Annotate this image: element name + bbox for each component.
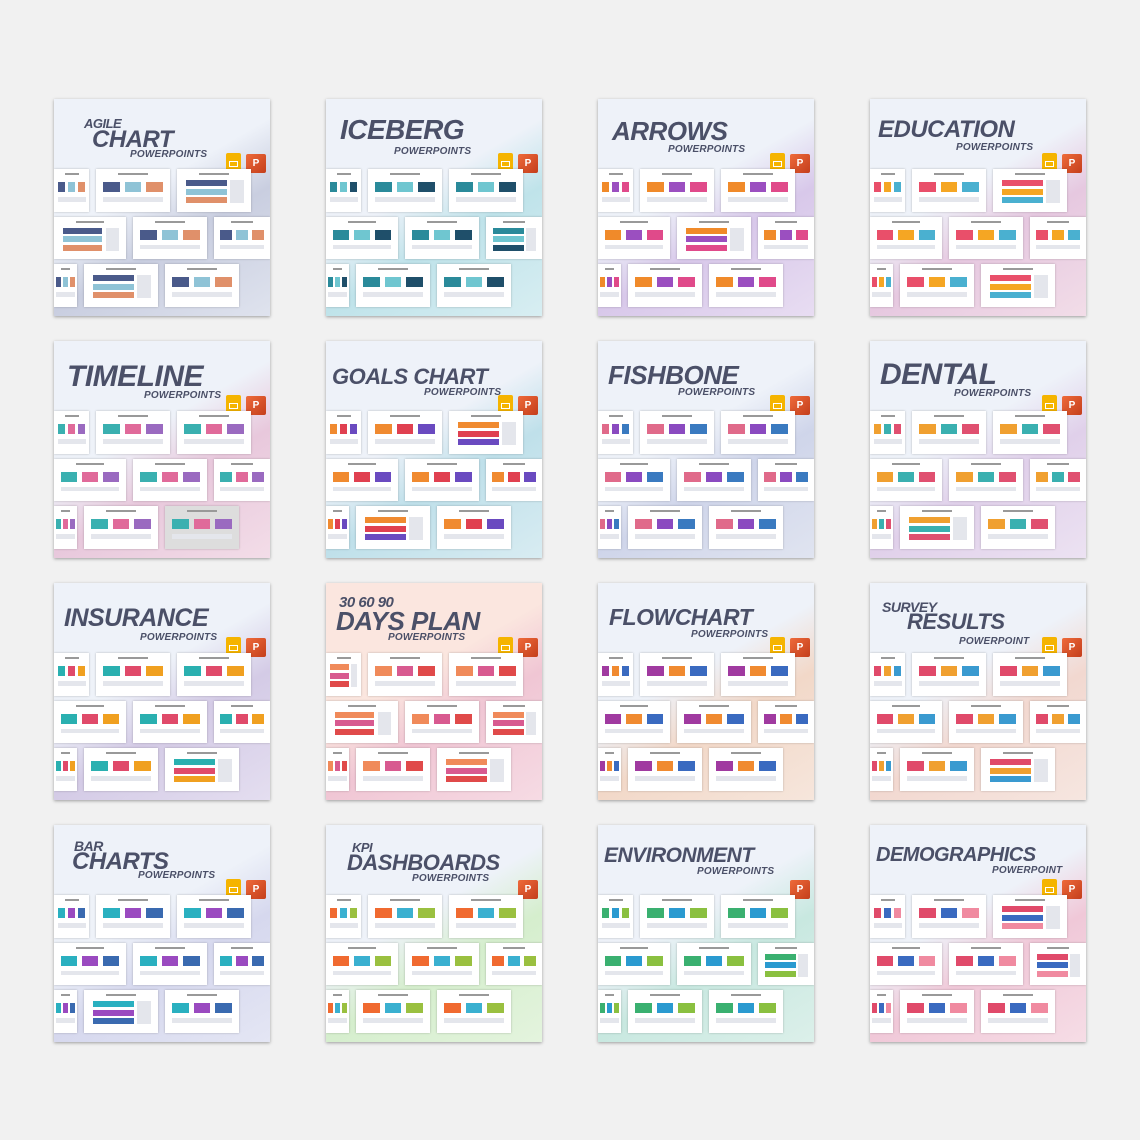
title: education [878,116,1033,153]
title: 30 60 90 days plan [336,594,481,643]
title: demographics: DEMOGRAPHICS [876,844,1036,866]
title: goals chart: POWERPOINTS [424,387,501,398]
card: arrows [598,99,814,316]
card: survey results [870,583,1086,800]
title: dental [880,358,1031,399]
title: kpi dashboards [347,840,500,884]
slide thumbnails [870,652,1086,792]
card: kpi dashboards [326,825,542,1042]
title: flowchart [609,604,768,640]
icons: google slides and powerpoint: P [1069,400,1075,411]
title: agile chart: POWERPOINTS [130,149,207,160]
title: flowchart: FLOWCHART [609,604,752,630]
icons: google slides and powerpoint: P [525,158,531,169]
title: survey results: POWERPOINT [959,636,1029,647]
icons: google slides and powerpoint [1042,637,1082,657]
title: fishbone [608,360,755,398]
icons: google slides and powerpoint: P [1069,158,1075,169]
slide thumbnails [598,893,814,1042]
title: timeline: POWERPOINTS [144,390,221,401]
title: bar charts: POWERPOINTS [138,870,215,881]
title: goals chart: GOALS CHART [332,364,487,389]
icons: google slides and powerpoint: P [253,884,259,895]
slide thumbnails [870,893,1086,1042]
title: iceberg: POWERPOINTS [394,146,471,157]
title: arrows [612,116,745,155]
icons: google slides and powerpoint: P [525,400,531,411]
slide thumbnails [326,168,542,308]
title: agile chart: AGILE [84,116,121,131]
title: flowchart: POWERPOINTS [691,629,768,640]
icons: google slides and powerpoint [226,395,266,415]
title: survey results [882,599,1030,647]
title: goals chart [332,364,501,398]
card: dental [870,341,1086,558]
card: goals chart [326,341,542,558]
slide thumbnails [326,652,542,792]
title: demographics: POWERPOINT [992,865,1062,876]
slide thumbnails [54,894,270,1034]
title: bar charts [72,838,215,881]
title: timeline: TIMELINE [67,360,203,393]
title: kpi dashboards: DASHBOARDS [347,850,500,875]
card: bar charts [54,825,270,1042]
slide thumbnails [54,410,270,550]
icons: google slides and powerpoint: P [253,400,259,411]
title: fishbone: FISHBONE [608,360,738,390]
title: bar charts: BAR [74,838,103,854]
title: kpi dashboards: KPI [352,840,372,855]
title: environment [598,825,814,893]
slide thumbnails [326,410,542,550]
icons: google slides and powerpoint: P [525,642,531,653]
icons: google slides and powerpoint [226,637,266,657]
icon: powerpoint: P [797,884,803,895]
icons: google slides and powerpoint [1042,395,1082,415]
card: flowchart [598,583,814,800]
icons: google slides and powerpoint [770,153,810,173]
title: environment: POWERPOINTS [697,866,774,877]
title: arrows: POWERPOINTS [668,144,745,155]
title: dental: DENTAL [880,358,996,391]
title: iceberg [340,114,471,157]
card: timeline [54,341,270,558]
title: education: POWERPOINTS [956,142,1033,153]
icons: google slides and powerpoint: P [1069,642,1075,653]
icons: google slides and powerpoint [226,879,266,899]
icons: google slides and powerpoint: P [253,158,259,169]
card: demographics [870,825,1086,1042]
slide thumbnails [870,168,1086,308]
title: arrows: ARROWS [612,116,727,146]
icons: google slides and powerpoint [1040,879,1084,903]
card: environment [598,825,814,1042]
title: survey results: SURVEY [882,599,937,615]
title: iceberg: ICEBERG [340,114,464,145]
title: survey results: RESULTS [907,609,1005,634]
slide thumbnails [54,652,270,792]
icons: google slides and powerpoint [770,395,810,415]
icons: google slides and powerpoint [498,153,538,173]
icons: google slides and powerpoint: P [797,642,803,653]
title: insurance: INSURANCE [64,604,208,632]
title: dental: POWERPOINTS [954,388,1031,399]
icons: google slides and powerpoint: P [797,400,803,411]
icons: google slides and powerpoint: P [253,642,259,653]
title: bar charts: CHARTS [72,848,169,875]
title: kpi dashboards: POWERPOINTS [412,873,489,884]
title: agile chart: CHART [92,126,173,153]
card: iceberg [326,99,542,316]
icons: google slides and powerpoint [1042,153,1082,173]
title: 30 60 90 days plan: POWERPOINTS [388,632,465,643]
card: 30 60 90 days plan [326,583,542,800]
card: education [870,99,1086,316]
title: demographics [870,825,1086,893]
title: agile chart [84,116,207,160]
card: fishbone [598,341,814,558]
icons: google slides and powerpoint [770,637,810,657]
slide thumbnails [598,168,814,308]
title: 30 60 90 days plan: DAYS PLAN [336,606,480,636]
icons: google slides and powerpoint [498,395,538,415]
icon: powerpoint: P [525,884,531,895]
slide thumbnails [326,893,542,1042]
slide thumbnails [598,410,814,550]
icons: google slides and powerpoint [226,153,266,173]
title: fishbone: POWERPOINTS [678,387,755,398]
slide thumbnails [598,652,814,792]
slide thumbnails [54,168,270,308]
icons: google slides and powerpoint: P [797,158,803,169]
card: agile chart [54,99,270,316]
icons: google slides and powerpoint: P [1069,884,1075,895]
title: insurance: POWERPOINTS [140,632,217,643]
title: education: EDUCATION [878,116,1014,143]
card: insurance [54,583,270,800]
slide thumbnails [870,410,1086,550]
title: environment: ENVIRONMENT [604,844,754,867]
icons: google slides and powerpoint [498,637,538,657]
title: insurance [64,604,217,643]
title: 30 60 90 days plan: 30 60 90 [339,594,393,611]
